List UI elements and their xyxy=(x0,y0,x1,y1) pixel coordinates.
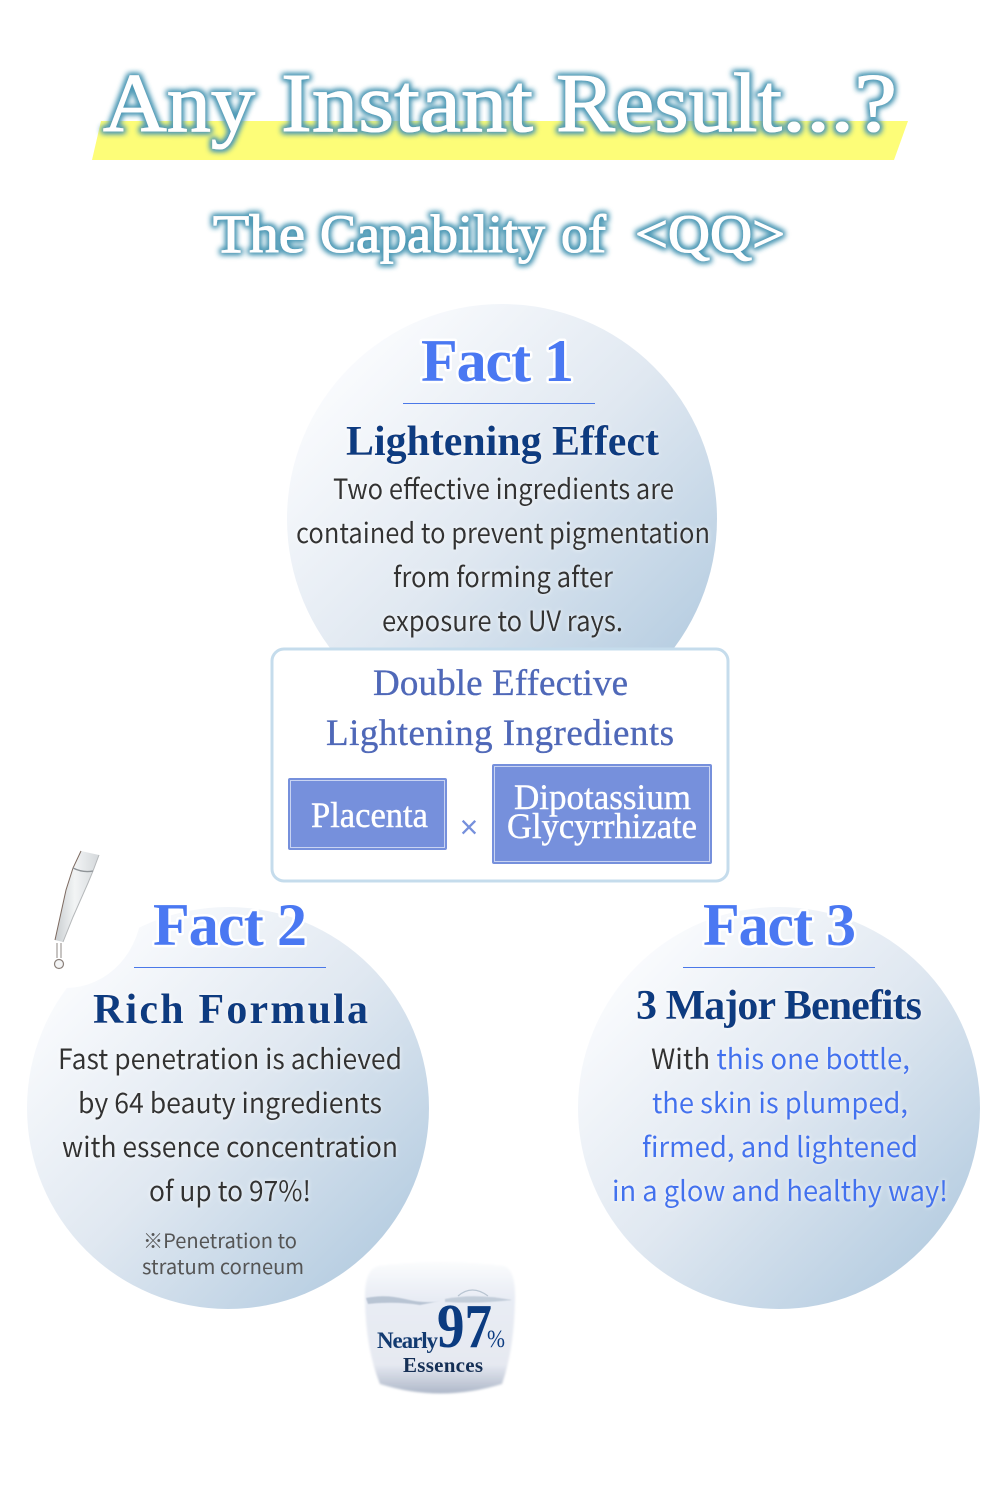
fact 3 body text: the skin is plumped, xyxy=(652,1082,908,1122)
badge: nearly 97% essences xyxy=(365,1262,515,1394)
subtitle: of xyxy=(561,204,606,264)
badge: nearly 97% essences: Essences xyxy=(403,1353,483,1377)
icon: dropper xyxy=(54,851,99,968)
ingredient: dipotassium glycyrrhizate xyxy=(492,764,712,864)
title highlight band xyxy=(92,121,908,160)
fact 3 circle xyxy=(578,907,980,1309)
fact 1 body text: contained to prevent pigmentation xyxy=(296,512,710,552)
fact 3 body text: in a glow and healthy way! xyxy=(612,1170,948,1210)
fact 3 body text xyxy=(612,1038,948,1210)
fact 2 body text: Fast penetration is achieved xyxy=(58,1038,402,1078)
fact 2 label: Fact 2 xyxy=(153,892,307,958)
panel: double effective lightening ingredients xyxy=(272,649,728,881)
fact 3 label: Fact 3 xyxy=(703,892,856,958)
title: ...? xyxy=(782,57,897,150)
badge: nearly 97% essences: 97 xyxy=(437,1293,492,1361)
badge: nearly 97% essences: Nearly xyxy=(377,1328,438,1353)
fact 1 heading: Lightening Effect xyxy=(346,419,659,465)
subtitle: <QQ> xyxy=(635,204,785,264)
fact 3 body text: With this one bottle, xyxy=(651,1038,910,1078)
fact 2 body text: of up to 97%! xyxy=(149,1170,311,1210)
fact 2 heading: Rich Formula xyxy=(93,987,368,1033)
fact 3 body text: firmed, and lightened xyxy=(642,1126,918,1166)
circle cut-out behind dropper xyxy=(0,822,142,988)
fact 2 circle xyxy=(27,907,429,1309)
ingredient: placenta xyxy=(288,778,447,850)
fact 2 footnote: stratum corneum xyxy=(142,1251,304,1280)
title: Any xyxy=(103,57,255,150)
title: Instant xyxy=(281,57,533,150)
subtitle xyxy=(213,204,785,264)
fact 2 body text: by 64 beauty ingredients xyxy=(78,1082,382,1122)
ingredient: placenta: Placenta xyxy=(311,795,428,835)
panel: fact 2 xyxy=(0,822,429,1309)
ingredients heading xyxy=(326,663,674,754)
subtitle: The xyxy=(213,204,305,264)
ingredient: dipotassium glycyrrhizate: Glycyrrhizate xyxy=(507,806,697,846)
fact 1 body text: Two effective ingredients are xyxy=(333,468,674,508)
fact 2 footnote: ※Penetration to xyxy=(143,1225,297,1254)
fact 2 body text xyxy=(58,1038,402,1210)
badge: nearly 97% essences: % xyxy=(487,1326,505,1353)
fact 2 body text: with essence concentration xyxy=(62,1126,398,1166)
fact 1 body text: exposure to UV rays. xyxy=(382,600,623,640)
title: Result xyxy=(556,57,782,150)
panel: fact 3 xyxy=(578,892,980,1309)
fact 2 footnote xyxy=(142,1225,304,1280)
panel: fact 1 xyxy=(287,304,717,734)
subtitle: Capability xyxy=(320,204,545,264)
fact 1 circle xyxy=(287,304,717,734)
title xyxy=(103,57,897,150)
multiply sign: × xyxy=(460,809,478,845)
ingredient: dipotassium glycyrrhizate: Dipotassium xyxy=(514,777,691,817)
fact 3 heading: 3 Major Benefits xyxy=(636,983,922,1029)
fact 1 label: Fact 1 xyxy=(421,328,574,394)
fact 1 body text xyxy=(296,468,710,640)
ingredients heading: Lightening Ingredients xyxy=(326,713,674,754)
fact 1 body text: from forming after xyxy=(393,556,613,596)
ingredients heading: Double Effective xyxy=(373,663,628,704)
